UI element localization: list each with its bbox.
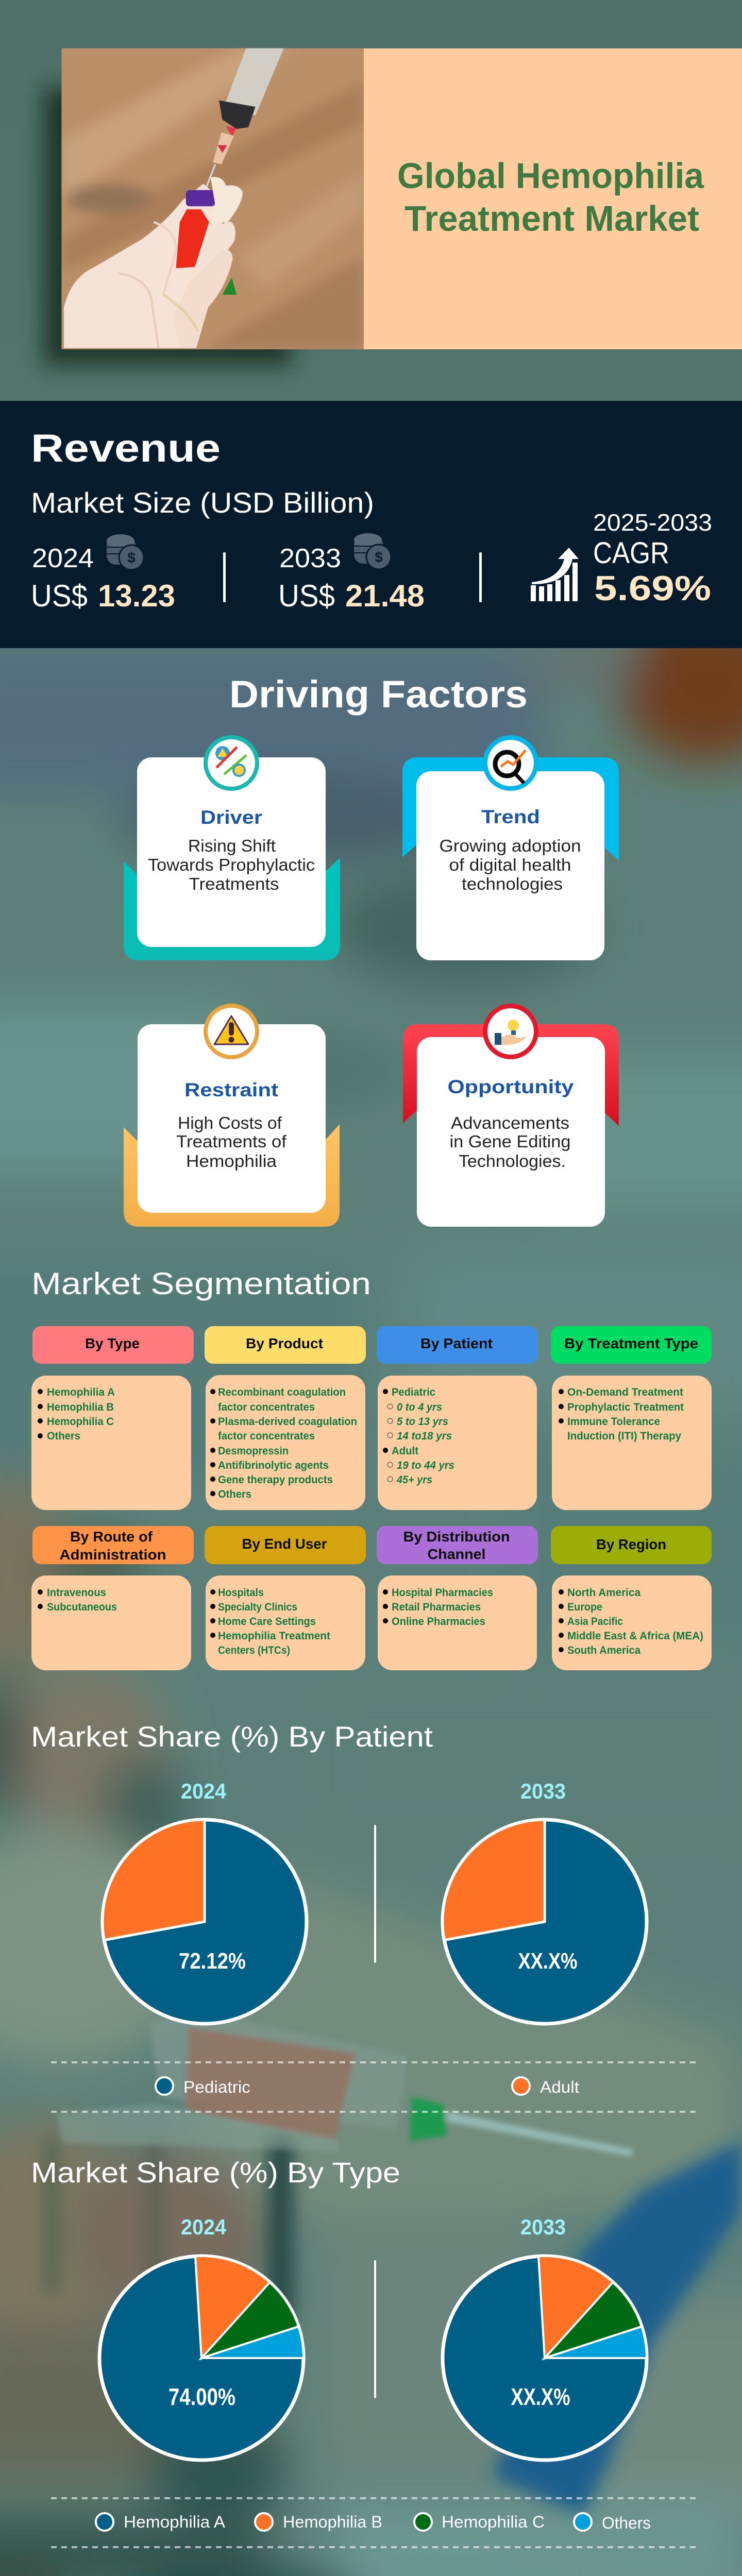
by type heading: By Type [85, 1335, 140, 1351]
by patient heading: By Patient [420, 1335, 493, 1351]
by end user list: Hemophilia Treatment [218, 1630, 330, 1642]
trend text: technologies [462, 874, 563, 893]
trend text [439, 836, 581, 893]
chart: patient share 2033 [443, 1779, 647, 2024]
revenue heading: Revenue [31, 427, 221, 470]
header photo: gloved hand with syringe and vial [61, 48, 364, 349]
panel: segment by region [551, 1526, 712, 1670]
title line 2: Treatment Market [404, 198, 699, 239]
by treatment type list: On-Demand Treatment [567, 1386, 683, 1398]
legend: patient: Pediatric [183, 2078, 250, 2096]
by route heading: Administration [60, 1547, 166, 1563]
chart: type share 2024 [99, 2215, 303, 2460]
panel: segment by product [205, 1326, 366, 1510]
panel: segment by end user [205, 1526, 366, 1670]
by treatment type heading: By Treatment Type [564, 1335, 698, 1351]
by distribution list: Online Pharmacies [392, 1616, 485, 1628]
chart: type share 2033 [443, 2215, 647, 2460]
by treatment type list: Immune Tolerance [567, 1416, 660, 1428]
icon: hand with bulb [483, 1004, 538, 1059]
by region list: Europe [567, 1601, 602, 1613]
panel: revenue [0, 401, 742, 648]
by distribution heading [403, 1529, 510, 1562]
2033 revenue value: 2033 [279, 544, 341, 573]
icon: coins 2024 [107, 534, 144, 570]
by type list: Hemophilia C [47, 1416, 114, 1428]
chart: type share 2033: XX.X% [511, 2383, 570, 2410]
panel: opportunity [403, 1004, 619, 1227]
by end user list [210, 1587, 330, 1656]
icon: warning triangle [204, 1004, 259, 1059]
chart: type share 2024: 74.00% [168, 2383, 235, 2410]
cagr label: CAGR [593, 536, 669, 570]
by patient list: 5 to 13 yrs [397, 1416, 448, 1428]
driver text: Towards Prophylactic [148, 855, 315, 874]
panel: segment by type [31, 1326, 194, 1510]
by route list: Intravenous [47, 1587, 106, 1599]
2024 revenue value: 13.23 [98, 579, 175, 613]
title panel [364, 48, 742, 349]
by type list: Hemophilia A [47, 1386, 115, 1398]
legend: patient: Adult [540, 2078, 579, 2096]
2024 revenue value [31, 544, 175, 613]
driver text [148, 836, 315, 893]
heading: market segmentation: Market Segmentation [31, 1266, 371, 1301]
chart: type share 2033: 2033 [520, 2215, 566, 2239]
panel: segment by route of administration [31, 1526, 194, 1670]
by distribution list [383, 1587, 493, 1628]
opportunity heading: Opportunity [447, 1076, 574, 1097]
icon: driver arrows [204, 735, 259, 791]
by distribution list: Hospital Pharmacies [392, 1587, 493, 1599]
driver text: Treatments [189, 874, 279, 893]
by region list [559, 1587, 703, 1656]
2033 revenue value [278, 544, 425, 613]
legend: type: Hemophilia C [442, 2513, 545, 2531]
legend: patient [51, 2062, 696, 2112]
by product list: factor concentrates [218, 1401, 315, 1413]
by product list: Gene therapy products [218, 1474, 333, 1486]
icon: coins 2033: $ [375, 549, 383, 565]
2024 revenue value: 2024 [32, 544, 94, 573]
opportunity text: Advancements [451, 1113, 569, 1132]
legend: type: Hemophilia B [283, 2513, 382, 2531]
2024 revenue value: US$ [31, 579, 88, 613]
trend text: Growing adoption [439, 836, 581, 855]
restraint text [176, 1113, 287, 1171]
by product list: Antifibrinolytic agents [218, 1460, 329, 1471]
by region list: South America [567, 1645, 640, 1656]
cagr value: 5.69% [594, 569, 711, 608]
legend: type: Hemophilia A [124, 2513, 226, 2531]
by route list [38, 1587, 117, 1613]
photo background with teal overlay [0, 608, 742, 2576]
opportunity text: in Gene Editing [449, 1132, 571, 1151]
by product list: factor concentrates [218, 1430, 315, 1442]
header background [0, 0, 742, 401]
by route list: Subcutaneous [47, 1601, 117, 1613]
by type list: Others [47, 1430, 80, 1442]
divider [374, 2260, 376, 2398]
divider [223, 552, 226, 602]
trend text: of digital health [449, 855, 571, 874]
by patient list: 19 to 44 yrs [397, 1460, 454, 1471]
chart: type share 2024: 2024 [181, 2215, 227, 2239]
chart: patient share 2033: XX.X% [518, 1948, 577, 1974]
by distribution list: Retail Pharmacies [392, 1601, 481, 1613]
title line 1: Global Hemophilia [397, 156, 704, 196]
by distribution heading: Channel [428, 1546, 485, 1562]
panel: restraint [124, 1004, 340, 1227]
cagr period: 2025-2033 [593, 509, 712, 536]
photo drop shadow [44, 88, 291, 365]
by patient list: Pediatric [392, 1386, 435, 1398]
by type list [38, 1386, 115, 1442]
panel: segment by treatment type [551, 1326, 712, 1510]
panel: segment by patient [377, 1326, 538, 1510]
by patient list: 14 to18 yrs [397, 1430, 452, 1442]
chart: patient share 2033: 2033 [520, 1779, 566, 1803]
by treatment type list: Induction (ITI) Therapy [567, 1430, 681, 1442]
opportunity text [449, 1113, 571, 1171]
by route heading [60, 1529, 166, 1563]
panel: trend [402, 735, 619, 960]
by product list: Plasma-derived coagulation [218, 1416, 357, 1428]
by product heading: By Product [246, 1335, 323, 1351]
by product list [210, 1386, 357, 1500]
by patient list: 0 to 4 yrs [397, 1401, 442, 1413]
legend: type: Others [602, 2514, 651, 2532]
icon: coins 2033 [354, 533, 391, 569]
by end user list: Home Care Settings [218, 1616, 316, 1628]
by region heading: By Region [596, 1536, 666, 1552]
divider [374, 1825, 376, 1963]
chart: patient share 2024 [103, 1779, 307, 2024]
by end user heading: By End User [242, 1536, 327, 1552]
by patient list [383, 1386, 454, 1486]
by product list: Recombinant coagulation [218, 1386, 346, 1398]
by type list: Hemophilia B [47, 1401, 114, 1413]
by treatment type list: Prophylactic Treatment [567, 1401, 684, 1413]
by distribution heading: By Distribution [403, 1529, 510, 1545]
chart: patient share 2024: 2024 [181, 1779, 227, 1803]
restraint text: Treatments of [176, 1132, 287, 1151]
trend heading: Trend [481, 806, 540, 827]
icon: coins 2024: $ [127, 550, 136, 566]
by route heading: By Route of [70, 1529, 153, 1545]
divider [479, 552, 482, 602]
restraint heading: Restraint [184, 1079, 278, 1100]
panel: segment by distribution channel [377, 1526, 538, 1670]
by product list: Desmopressin [218, 1445, 289, 1457]
2033 revenue value: US$ [278, 579, 335, 613]
driver text: Rising Shift [188, 836, 276, 855]
by end user list: Centers (HTCs) [218, 1645, 290, 1656]
by product list: Others [218, 1488, 251, 1500]
by patient list: Adult [392, 1445, 418, 1457]
chart: patient share 2024: 72.12% [179, 1948, 246, 1974]
by treatment type list [559, 1386, 684, 1442]
by end user list: Hospitals [218, 1587, 264, 1599]
restraint text: High Costs of [178, 1113, 282, 1132]
by patient list: 45+ yrs [396, 1474, 432, 1486]
icon: trend magnifier [483, 735, 538, 791]
by region list: Middle East & Africa (MEA) [567, 1630, 703, 1642]
panel: driver [124, 735, 340, 960]
heading: driving factors: Driving Factors [229, 673, 528, 716]
by end user list: Specialty Clinics [218, 1601, 297, 1613]
restraint text: Hemophilia [186, 1151, 277, 1171]
heading: market share by type: Market Share (%) By Type [31, 2156, 400, 2189]
legend: type [51, 2498, 696, 2547]
driver heading: Driver [200, 807, 262, 828]
by region list: North America [567, 1587, 640, 1599]
by region list: Asia Pacific [567, 1616, 623, 1628]
heading: market share by patient: Market Share (%) By Patient [31, 1720, 433, 1753]
2033 revenue value: 21.48 [345, 579, 425, 613]
market size subtitle: Market Size (USD Billion) [31, 486, 374, 519]
opportunity text: Technologies. [459, 1151, 566, 1171]
icon: growth chart [531, 548, 579, 601]
